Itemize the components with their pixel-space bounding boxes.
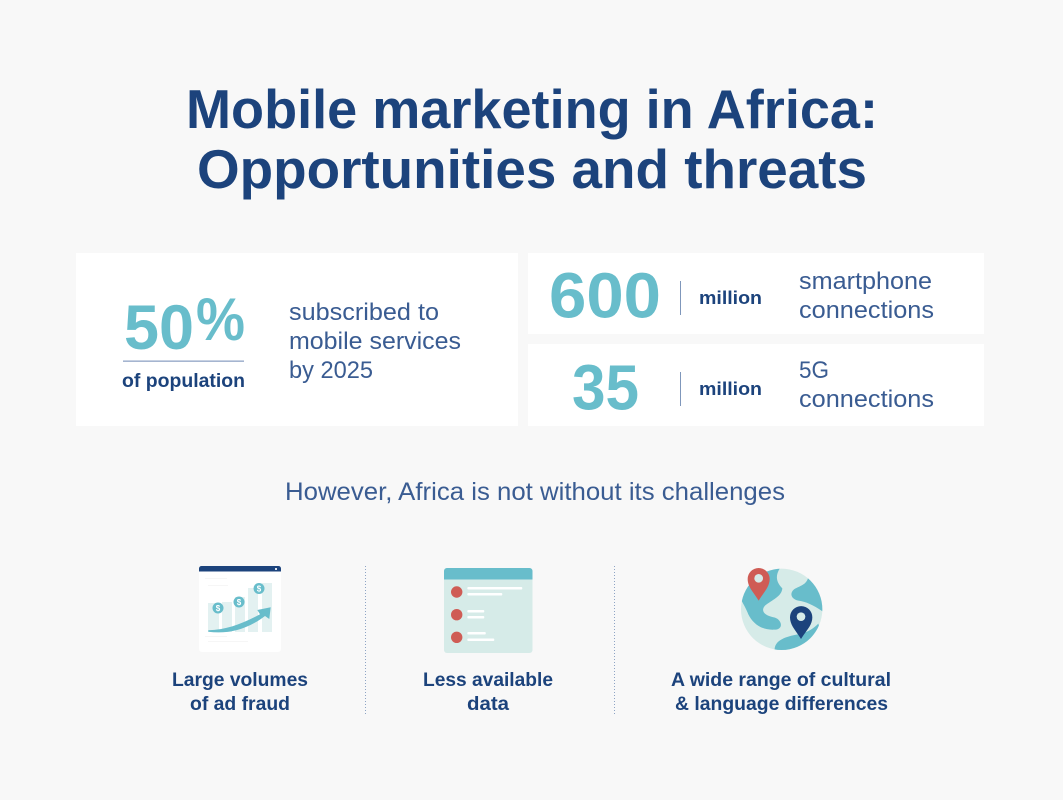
label: cultural differences — [671, 670, 891, 715]
label: ad fraud — [172, 670, 308, 715]
stat: 35: 35 — [572, 352, 639, 424]
description: smartphone connections — [799, 268, 934, 324]
stat: 50%: 50 — [124, 293, 194, 363]
panel: 600 million smartphone connections — [528, 253, 984, 334]
icon: data list — [444, 568, 532, 653]
stat label: of population: of population — [122, 371, 245, 392]
title — [186, 78, 878, 200]
stat unit: million: million — [699, 288, 762, 308]
label: less data: data — [467, 694, 509, 715]
description: 5G connections: 5G — [799, 357, 829, 384]
title: Mobile marketing in Africa: — [186, 78, 878, 140]
stat: 50%: % — [196, 286, 245, 353]
stat unit: million: million — [699, 379, 762, 399]
description: smartphone connections: connections — [799, 297, 934, 324]
stat: 600: 600 — [549, 260, 661, 332]
description: smartphone connections: smartphone — [799, 268, 932, 295]
icon: ad fraud chart: $ — [237, 598, 242, 607]
icon: ad fraud chart: $ — [257, 584, 262, 594]
label: cultural differences: A wide range of cultural — [671, 670, 891, 691]
label: ad fraud: Large volumes — [172, 670, 308, 691]
label: cultural differences: & language differences — [675, 694, 888, 715]
icon: ad fraud chart — [199, 566, 281, 652]
description: subscribed: subscribed to — [289, 299, 439, 326]
stat: 50% — [124, 286, 245, 363]
label: ad fraud: of ad fraud — [190, 694, 290, 715]
subheading: However, Africa is not without its challenges — [285, 478, 785, 506]
description: subscribed: by 2025 — [289, 357, 373, 384]
description: 5G connections — [799, 357, 934, 413]
label: less data — [423, 670, 553, 715]
label: less data: Less available — [423, 670, 553, 691]
title: Opportunities and threats — [197, 138, 867, 200]
panel: 35 million 5G connections — [528, 344, 984, 426]
description: 5G connections: connections — [799, 386, 934, 413]
icon: globe with pins — [741, 568, 822, 650]
panel: 50% of population — [76, 253, 518, 426]
description: subscribed: mobile services — [289, 328, 461, 355]
icon: ad fraud chart: $ — [216, 604, 221, 613]
description: subscribed — [289, 299, 461, 384]
